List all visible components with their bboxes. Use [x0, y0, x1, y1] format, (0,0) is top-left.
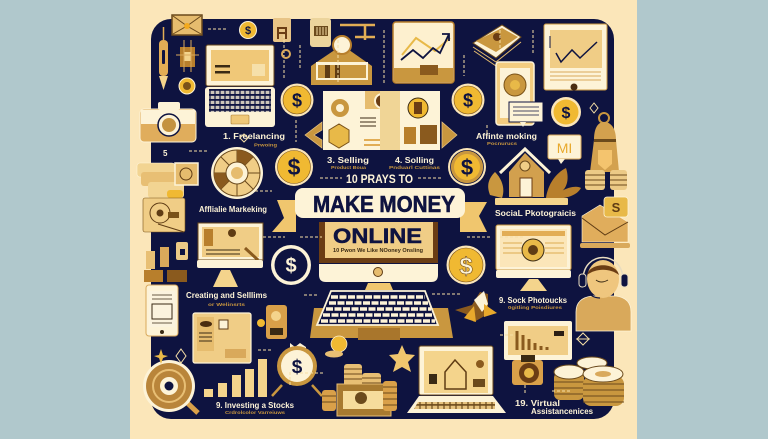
- icon: lantern rocket on coins: [585, 113, 627, 190]
- keyboard on desk: [310, 291, 453, 340]
- icon: tile and envelope: S: [612, 200, 621, 215]
- icon: tile and envelope: [580, 197, 630, 248]
- text: 4. Solling: 4. Solling: [395, 156, 434, 165]
- text: 3. Selling: [327, 156, 369, 170]
- title banner: MAKE MONEY: [313, 191, 455, 217]
- icon: dollar coin: $: [463, 90, 473, 110]
- icon: small dollar coin top: [240, 22, 256, 38]
- text: Social Photograicis: SociaL Pkotograicis: [495, 209, 577, 218]
- text: 5: 5: [163, 149, 168, 158]
- icon: shop with avatar: [311, 25, 375, 85]
- text: 9. Sock Photoucks: [499, 296, 568, 310]
- icon: dollar coin: [446, 246, 486, 284]
- icon: dollar coin: $: [562, 105, 571, 122]
- icon: rocket: [455, 291, 497, 322]
- icon: envelope top left: [172, 15, 202, 35]
- icon: open book: [323, 91, 440, 150]
- navy main panel: [151, 19, 614, 419]
- icon: tablet chart: [544, 24, 607, 90]
- text: Affinte moking: [476, 132, 537, 146]
- icon: money bag: [272, 343, 322, 396]
- icon: dollar coin: $: [461, 155, 473, 180]
- text: 4. Solling: Pnduarl Cuttinas: [389, 165, 441, 170]
- icon: dollar coin: [275, 148, 313, 186]
- central monitor: [319, 222, 438, 290]
- icon: left chevron: [305, 122, 322, 148]
- text: 19. Virtual Assistance: Assistancenices: [531, 407, 594, 416]
- text: 9. Sock Photoucks: 0gitling Poisdiures: [508, 305, 563, 310]
- icon: small dollar coin top: $: [245, 25, 251, 37]
- icon: magnifier: [143, 360, 198, 413]
- icon: bar tile: [310, 18, 331, 47]
- icon: cash stack: [473, 25, 521, 66]
- icon: large coin stacks: [554, 357, 624, 406]
- text: 19. Virtual Assistance: 19. Virtual: [515, 399, 560, 408]
- icon: house with leaves: [488, 149, 581, 205]
- text: Affiliate Marketing: Afflialie Markeking: [199, 205, 267, 214]
- icon: dollar coin: $: [459, 253, 473, 280]
- icon: dollar coin: $: [292, 90, 302, 110]
- text: 10 Prays To: 10 PRAYS TO: [346, 174, 413, 186]
- icon: chart screen: [504, 321, 572, 360]
- text: 9. Investing a Stocks: [216, 401, 295, 415]
- text: 3. Selling: 3. Selling: [327, 156, 369, 165]
- text: Creating and Selling: [186, 291, 268, 307]
- text: Affinte moking: Affinte moking: [476, 132, 537, 141]
- text: Creating and Selling: or Welinsrts: [208, 302, 246, 307]
- icon: phone and speech bubble: [496, 62, 543, 127]
- text: 1. Freelancing: Prwoing: [254, 142, 277, 148]
- text: 9. Sock Photoucks: 9. Sock Photoucks: [499, 296, 568, 305]
- icon: laptop freelancing: [205, 45, 275, 127]
- icon: MI speech bubble: [548, 135, 581, 164]
- text: 3. Selling: Product Boua: [331, 165, 367, 170]
- text: 1. Freelancing: [223, 132, 285, 148]
- icon: headset tile: [143, 198, 185, 232]
- icon: support agent: [576, 258, 631, 331]
- cream page: [130, 0, 637, 439]
- text: 1. Freelancing: 1. Freelancing: [223, 132, 285, 141]
- icon: small jar: [257, 305, 287, 339]
- icon: money bag: $: [292, 357, 303, 378]
- icon: camera dark gold: [512, 355, 543, 385]
- ribbon tails: [272, 200, 487, 232]
- text: Affinte moking: Pocnurucs: [487, 141, 518, 146]
- central monitor: 10 Pwon We Like NOoney Onsling: [333, 248, 423, 254]
- icon: laptop with house: [407, 346, 506, 413]
- icon: MI speech bubble: MI: [557, 140, 572, 156]
- icon: screen with pen: [197, 223, 263, 287]
- icon: folders: [137, 163, 198, 198]
- text: 9. Investing a Stocks: 9. Investing a Stocks: [216, 401, 295, 410]
- text: 9. Investing a Stocks: Crdrolcolor Varreiuws: [225, 410, 286, 415]
- icon: chip and ring: [176, 40, 199, 94]
- icon: dollar coin: [452, 84, 484, 116]
- icon: chair tile: [273, 18, 291, 42]
- icon: right chevron: [442, 122, 457, 148]
- text: 19. Virtual Assistance: [515, 399, 594, 416]
- icon: dollar badge: [271, 245, 311, 285]
- icon: dollar coin: [280, 84, 314, 116]
- central monitor: ONLINE: [333, 225, 422, 248]
- connector lines and sparkles: [154, 29, 598, 395]
- icon: pen: [159, 27, 168, 90]
- icon: coin stacks and banknote: [322, 336, 397, 416]
- icon: phone: [146, 285, 178, 336]
- icon: dollar coin: $: [288, 154, 301, 180]
- icon: star: [389, 345, 415, 372]
- icon: dollar coin: [448, 148, 486, 186]
- icon: dollar badge: $: [285, 255, 297, 277]
- icon: dollar coin: [551, 97, 581, 127]
- icon: segmented wheel: [211, 147, 263, 199]
- text: Creating and Selling: Creating and Selllims: [186, 291, 268, 300]
- bar chart: [204, 359, 267, 397]
- text: 4. Solling: [389, 156, 441, 170]
- icon: camera: [140, 102, 196, 142]
- icon: shop tablet: [193, 313, 251, 363]
- icon: rising chart card: [393, 22, 454, 83]
- icon: right monitor: [496, 225, 571, 291]
- icon: small jars and bubble: [144, 242, 188, 282]
